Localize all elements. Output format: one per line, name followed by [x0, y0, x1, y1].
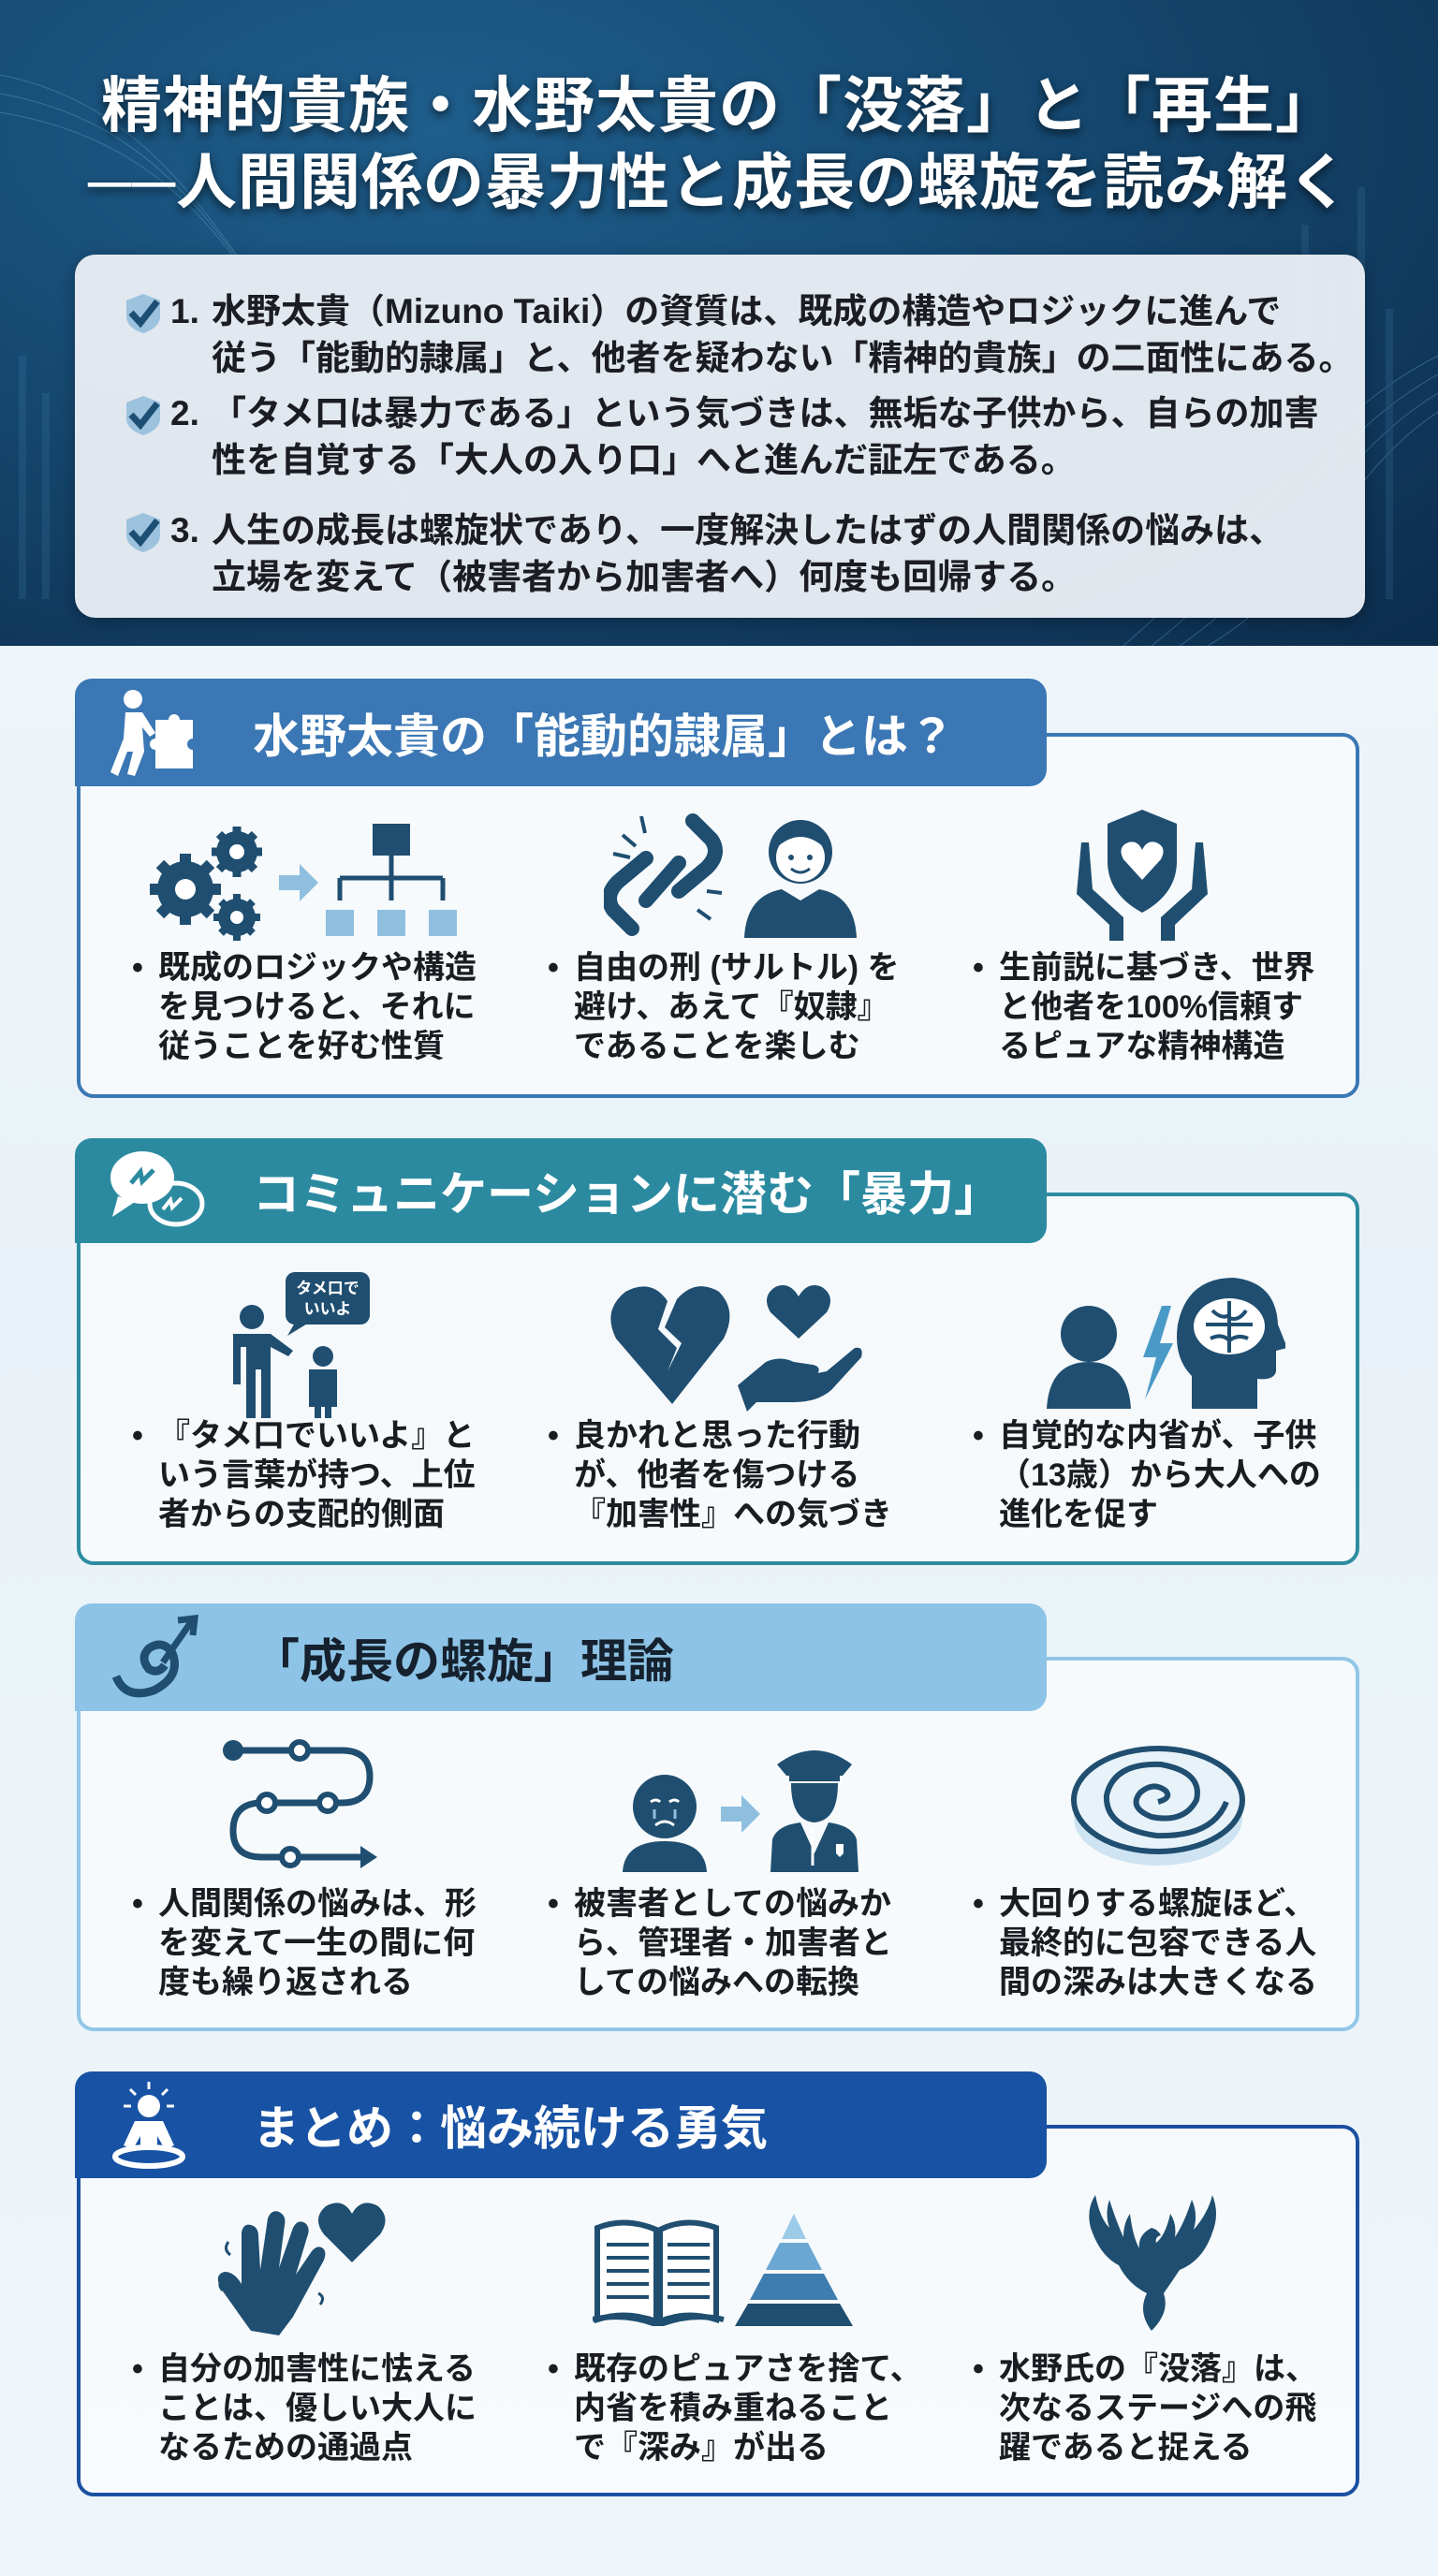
panel 2 tab: コミュニケーションに潜む「暴力」 [253, 1168, 1001, 1221]
panel 1 col 3 text: と他者を100%信頼す [999, 989, 1303, 1025]
panel 1 box [77, 733, 1359, 1098]
panel 3 col 2 text: しての悩みへの転換 [574, 1965, 859, 2000]
panel 3 col 1 text: 度も繰り返される [158, 1965, 413, 2000]
summary item 3 [126, 511, 1284, 596]
panel 4 col 3 text: 躍であると捉える [999, 2430, 1253, 2466]
panel 2 tab [75, 1138, 1047, 1243]
panel 2 col 1 text: 者からの支配的側面 [158, 1497, 445, 1532]
panel 1 col 2 text [574, 948, 967, 1066]
panel 4 col 3 text: 水野氏の『没落』は、 [999, 2351, 1317, 2387]
panel 4 box [77, 2125, 1359, 2496]
summary item 3: 人生の成長は螺旋状であり、一度解決したはずの人間関係の悩みは、 [212, 511, 1284, 549]
panel 3 col 3 text: 最終的に包容できる人 [999, 1925, 1316, 1961]
panel 3 col 3 text: 大回りする螺旋ほど、 [999, 1886, 1315, 1922]
panel 3 col 2 text: ら、管理者・加害者と [574, 1925, 892, 1961]
panel 3 col 1 text [158, 1884, 551, 2002]
panel 2 col 1 text [158, 1416, 551, 1534]
panel 4 col 2 text [574, 2349, 967, 2467]
summary item 1: 従う「能動的隷属」と、他者を疑わない「精神的貴族」の二面性にある。 [212, 339, 1354, 377]
panel 4 tab: まとめ：悩み続ける勇気 [253, 2102, 768, 2155]
panel 2 col 3 text: 進化を促す [999, 1497, 1158, 1532]
panel 4 col 2 text: で『深み』が出る [574, 2430, 829, 2466]
panel 1 col 3 text: 生前説に基づき、世界 [999, 950, 1315, 986]
panel 1 icon: gears to hierarchy [150, 824, 457, 941]
panel 3 col 3 text [999, 1884, 1392, 2002]
panel 2 icon: person, lightning, head with brain [1047, 1278, 1285, 1409]
panel 1 col 1 text: 従うことを好む性質 [158, 1029, 445, 1064]
panel 1 col 3 text: るピュアな精神構造 [999, 1029, 1284, 1064]
panel 3 icon: winding path [223, 1739, 377, 1868]
panel 1 col 1 text: 既成のロジックや構造 [158, 950, 477, 986]
panel 2 icon: adult and child with speech bubble: いいよ [304, 1300, 351, 1318]
title: 精神的貴族・水野太貴の「没落」と「再生」 [101, 71, 1337, 139]
panel 4 col 3 text [999, 2349, 1392, 2467]
panel 2 col 1 text: 『タメ口でいいよ』と [158, 1418, 475, 1454]
panel 1 tab: 水野太貴の「能動的隷属」とは？ [253, 710, 955, 762]
panel 2 col 2 text: 『加害性』への気づき [574, 1497, 892, 1532]
summary item 2: 性を自覚する「大人の入り口」へと進んだ証左である。 [212, 441, 1076, 479]
panel 4 col 2 text: 内省を積み重ねること [574, 2391, 892, 2426]
panel 3 col 1 text: 人間関係の悩みは、形 [158, 1886, 477, 1922]
panel 2 col 2 text: が、他者を傷つける [574, 1457, 859, 1493]
panel 3 col 2 text: 被害者としての悩みか [574, 1886, 891, 1922]
panel 4 icon: phoenix [1089, 2195, 1216, 2331]
summary item 2 [126, 394, 1319, 479]
panel 4 col 2 text: 既存のピュアさを捨て、 [574, 2351, 922, 2387]
panel 4 col 3 text: 次なるステージへの飛 [999, 2391, 1316, 2426]
panel 3 icon: spiral disc [1071, 1746, 1245, 1866]
panel 2 icon: adult and child with speech bubble [233, 1272, 370, 1418]
summary item 2: 「タメ口は暴力である」という気づきは、無垢な子供から、自らの加害 [212, 394, 1319, 432]
summary item 1: 1. [170, 292, 199, 330]
panel 1 col 2 text: 自由の刑 (サルトル) を [574, 950, 900, 986]
panel 4 icon: trembling hand and heart [217, 2203, 386, 2335]
panel 1 col 1 text [158, 948, 551, 1066]
panel 2 col 3 text: 自覚的な内省が、子供 [999, 1418, 1316, 1454]
title [85, 71, 1350, 218]
panel 2 box [77, 1193, 1359, 1565]
panel 3 tab [75, 1603, 1047, 1711]
panel 4 col 1 text: ことは、優しい大人に [158, 2391, 477, 2426]
panel 4 col 1 text: なるための通過点 [158, 2430, 413, 2466]
summary item 2: 2. [170, 394, 199, 432]
panel 1 col 2 text: 避け、あえて『奴隷』 [574, 989, 889, 1025]
panel 1 tab [75, 679, 1047, 786]
panel 1 col 3 text [999, 948, 1392, 1066]
title: ──人間関係の暴力性と成長の螺旋を読み解く [88, 148, 1350, 216]
panel 2 icon: adult and child with speech bubble: タメ口で [296, 1280, 360, 1297]
panel 2 col 3 text: （13歳）から大人への [999, 1457, 1321, 1493]
panel 2 col 1 text: いう言葉が持つ、上位 [158, 1457, 476, 1493]
panel 1 icon: hands with heart shield [1077, 810, 1208, 941]
panel 3 col 3 text: 間の深みは大きくなる [999, 1965, 1317, 2000]
panel 2 col 2 text [574, 1416, 967, 1534]
panel 3 tab: 「成長の螺旋」理論 [253, 1634, 674, 1687]
panel 3 col 2 text [574, 1884, 967, 2002]
panel 4 icon: book and pyramid [593, 2214, 853, 2326]
panel 3 col 1 text: を変えて一生の間に何 [158, 1925, 475, 1961]
panel 3 icon: victim to officer [623, 1750, 858, 1872]
summary item 3: 3. [170, 511, 199, 549]
panel 1 icon: broken chain and person [604, 813, 857, 938]
header background [0, 0, 1438, 646]
summary item 3: 立場を変えて（被害者から加害者へ）何度も回帰する。 [212, 558, 1076, 596]
panel 1 col 2 text: であることを楽しむ [574, 1029, 860, 1064]
panel 1 col 1 text: を見つけると、それに [158, 989, 476, 1025]
panel 2 col 2 text: 良かれと思った行動 [574, 1418, 860, 1454]
panel 2 icon: broken heart and hand heart [610, 1285, 862, 1412]
summary box [75, 255, 1365, 618]
panel 4 tab [75, 2071, 1047, 2178]
panel 4 col 1 text [158, 2349, 551, 2467]
panel 4 col 1 text: 自分の加害性に怯える [158, 2351, 476, 2387]
panel 2 col 3 text [999, 1416, 1392, 1534]
panel 3 box [77, 1657, 1359, 2031]
summary item 1 [126, 292, 1354, 377]
summary item 1: 水野太貴（Mizuno Taiki）の資質は、既成の構造やロジックに進んで [212, 292, 1281, 330]
